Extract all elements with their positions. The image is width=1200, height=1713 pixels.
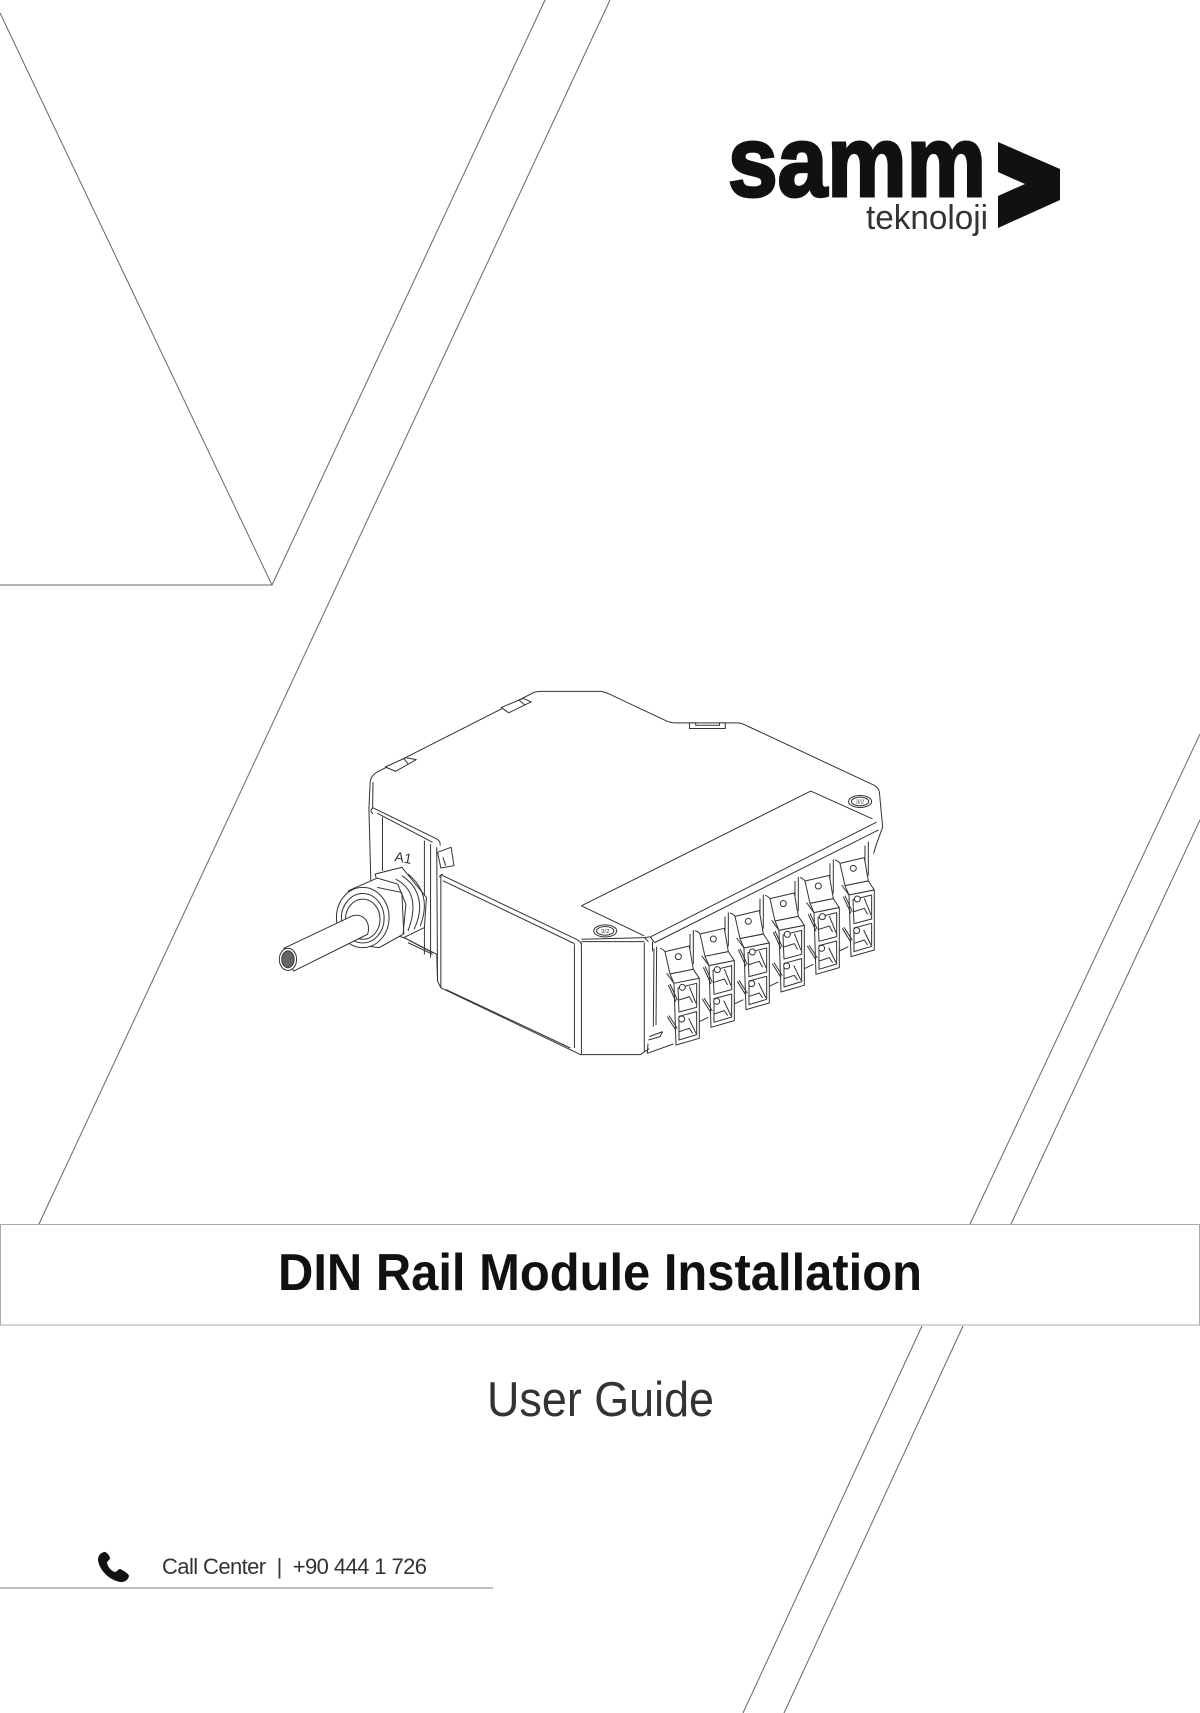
connector row — [647, 842, 875, 1053]
cable gland — [279, 867, 426, 971]
module label A1: A1 — [393, 848, 413, 867]
footer contact — [0, 1552, 493, 1588]
connector 2 — [695, 912, 734, 1027]
logo wordmark: samm — [728, 106, 986, 218]
icon: phone — [98, 1552, 129, 1582]
screw right: 3/2 — [856, 800, 864, 805]
screw right — [849, 795, 872, 807]
connector 5 — [800, 859, 839, 974]
connector 3 — [730, 895, 769, 1010]
module housing — [279, 691, 883, 1055]
screw left — [594, 925, 617, 937]
connector 1 — [660, 930, 699, 1045]
clip tabs — [385, 698, 725, 771]
logo: samm teknoloji — [728, 106, 1060, 237]
label area — [581, 791, 872, 936]
logo arrow — [998, 142, 1060, 228]
title band — [0, 1224, 1200, 1325]
connector 6 — [835, 842, 874, 957]
subtitle: User Guide — [487, 1373, 714, 1427]
main title: DIN Rail Module Installation — [278, 1244, 922, 1302]
device illustration: DIN rail module — [279, 691, 883, 1055]
call center text: Call Center | +90 444 1 726 — [162, 1554, 427, 1579]
screw left: 3/2 — [601, 929, 610, 935]
logo subtitle: teknoloji — [866, 199, 988, 237]
connector 4 — [765, 877, 804, 992]
